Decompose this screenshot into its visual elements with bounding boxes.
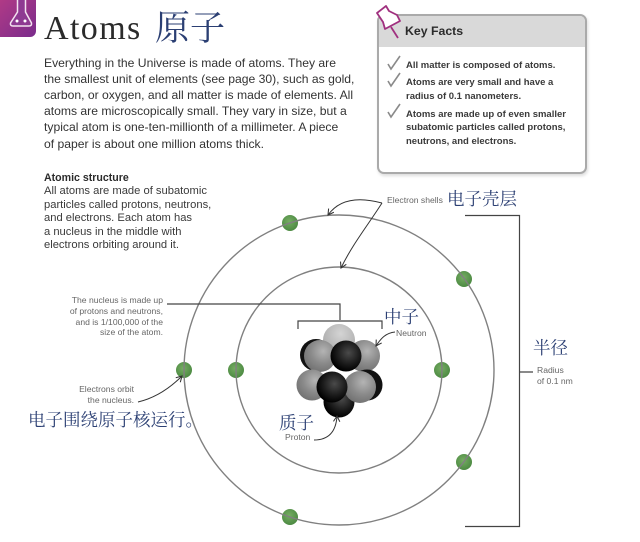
intro text: the smallest unit of elements (see page 30), such as gold,	[44, 72, 354, 86]
label: radius: Radius	[537, 365, 564, 375]
icon: flask tab	[0, 0, 36, 37]
label: nucleus: of protons and neutrons,	[70, 306, 163, 316]
label: electrons orbit: the nucleus.	[88, 395, 134, 405]
intro text: atoms are microscopically small. They vary in size, but a	[44, 104, 347, 118]
intro text: typical atom is one-ten-millionth of a millimeter. A piece	[44, 120, 338, 134]
arrow: electron shells	[328, 200, 382, 215]
intro text: carbon, or oxygen, and all matter is made of elements. All	[44, 88, 353, 102]
cn label: proton: 质子	[279, 413, 314, 433]
label: electrons orbit: Electrons orbit	[79, 384, 134, 394]
label: nucleus: and is 1/100,000 of the	[76, 317, 163, 327]
key facts list: radius of 0.1 nanometers. Atoms are made up of even smaller	[406, 91, 566, 120]
label: nucleus: The nucleus is made up	[72, 295, 163, 305]
text: atomic structure: electrons orbiting around it.	[44, 239, 179, 251]
cn label: radius: 半径	[533, 338, 568, 358]
text: atomic structure: All atoms are made of subatomic	[44, 185, 207, 197]
nucleus	[296, 324, 382, 418]
electrons	[176, 215, 472, 525]
panel: key facts	[377, 14, 587, 174]
intro text: Everything in the Universe is made of atoms. They are	[44, 56, 336, 70]
icon: pushpin	[376, 5, 401, 38]
key facts list: All matter is composed of atoms. Atoms are very small and have a	[406, 60, 555, 88]
text: atomic structure: Atomic structure	[44, 172, 129, 184]
title: Atoms	[44, 10, 142, 47]
label: electrons orbit	[79, 384, 134, 405]
check marks	[387, 56, 400, 118]
arrow: proton	[314, 416, 337, 440]
text: atomic structure: and electrons. Each atom has	[44, 212, 192, 224]
arrow: electrons orbit	[138, 376, 182, 402]
shell: outer	[184, 215, 494, 525]
bracket: radius	[465, 216, 533, 526]
label: radius	[537, 365, 573, 386]
leader: nucleus bracket	[167, 304, 382, 329]
arrow: electron shells inner	[341, 203, 382, 268]
label: electron shells: Electron shells	[387, 195, 443, 205]
intro text: of paper is about one million atoms thick.	[44, 137, 264, 151]
label: radius: of 0.1 nm	[537, 376, 573, 386]
label: neutron: Neutron	[396, 328, 427, 338]
cn label: electrons orbit: 电子围绕原子核运行。	[28, 410, 203, 430]
arrow: neutron	[376, 332, 395, 346]
cn label: neutron: 中子	[384, 307, 419, 327]
label: nucleus	[70, 295, 163, 337]
key facts list	[406, 60, 566, 147]
text: atomic structure: particles called protons, neutrons,	[44, 199, 211, 211]
text: atomic structure: a nucleus in the middle with	[44, 226, 181, 238]
shell: inner	[236, 267, 442, 473]
title chinese: 原子	[155, 9, 225, 48]
key facts list: neutrons, and electrons.	[406, 136, 516, 147]
key facts header	[379, 16, 585, 47]
label: proton: Proton	[285, 432, 310, 442]
intro text	[44, 56, 354, 151]
text: atomic structure	[44, 172, 211, 251]
label: nucleus: size of the atom.	[100, 327, 163, 337]
key facts list: subatomic particles called protons,	[406, 122, 565, 133]
heading: key facts: Key Facts	[405, 24, 463, 38]
cn label: electron shells: 电子壳层	[447, 189, 517, 209]
